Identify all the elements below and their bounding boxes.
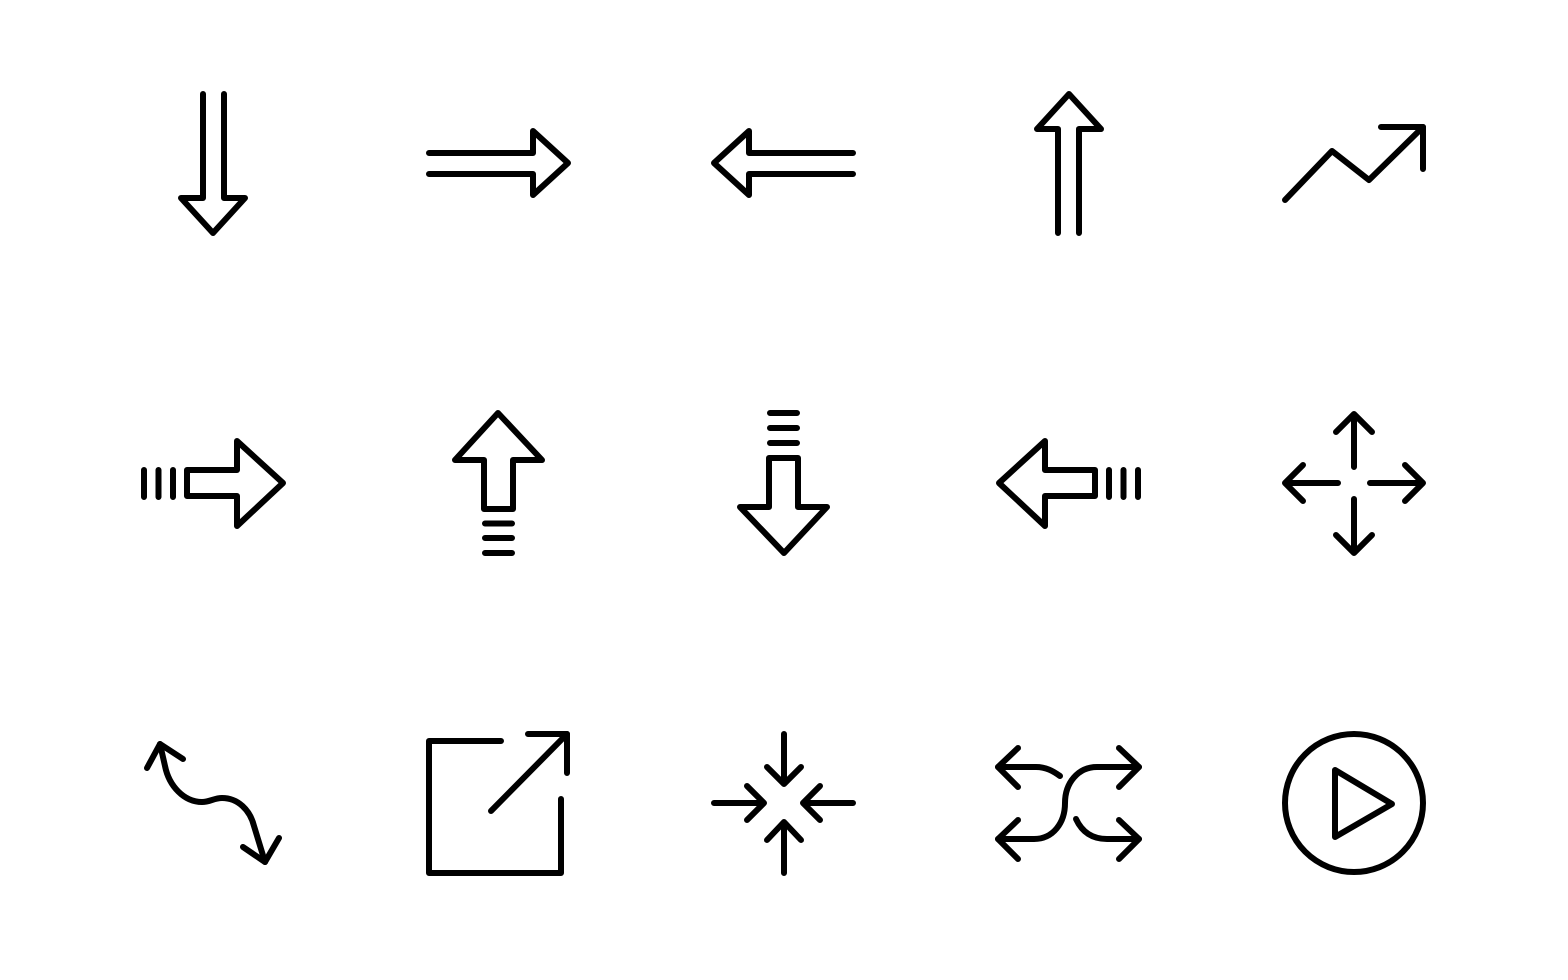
icon: arrow up with motion bars <box>455 413 542 553</box>
icon: four arrows pointing outward <box>1285 414 1423 553</box>
icon: shuffle crossing arrows <box>998 748 1139 859</box>
icon: double-line arrow left <box>714 131 853 195</box>
icon: double-line arrow down <box>181 94 245 233</box>
icon: trending up arrow <box>1285 127 1423 200</box>
icon: arrow left with motion bars <box>999 441 1138 526</box>
icon: four arrows pointing inward <box>714 734 853 873</box>
icon: external link box with arrow <box>429 734 567 873</box>
icon: double-line arrow up <box>1037 94 1101 233</box>
icon: play button in circle <box>1285 734 1423 872</box>
icon: arrow down with motion bars <box>740 413 827 553</box>
icon: double-line arrow right <box>429 131 568 195</box>
icon: wavy double-headed arrow <box>147 744 279 862</box>
icon: arrow right with motion bars <box>144 441 283 526</box>
